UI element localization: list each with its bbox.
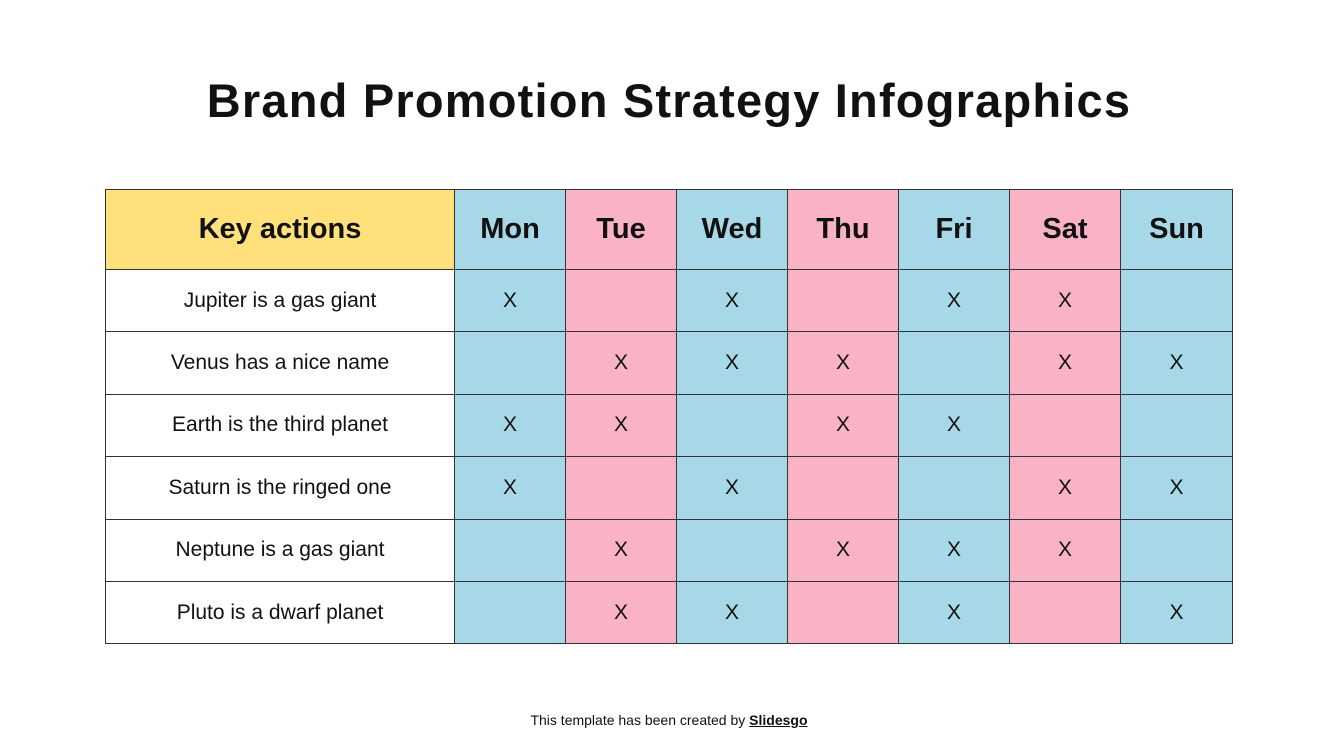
table: weekly key actions: X: [503, 413, 517, 436]
table: weekly key actions: X: [1169, 601, 1184, 624]
table: weekly key actions: X: [836, 351, 850, 374]
table: weekly key actions: X: [1169, 351, 1184, 374]
table: weekly key actions: X: [1058, 476, 1072, 499]
table: weekly key actions: X: [725, 601, 739, 624]
table: weekly key actions: X: [1058, 351, 1072, 374]
footer credit: This template has been created by Slidesgo: [530, 712, 808, 728]
table: weekly key actions: Earth is the third planet: [172, 413, 388, 436]
table: weekly key actions: X: [947, 289, 961, 312]
table: weekly key actions: Wed: [702, 213, 762, 245]
table: weekly key actions: X: [947, 601, 961, 624]
table: weekly key actions: X: [1169, 476, 1184, 499]
table: weekly key actions: X: [836, 538, 850, 561]
table: weekly key actions: [105, 189, 1233, 644]
table: weekly key actions: Sun: [1149, 213, 1204, 245]
table: weekly key actions: Neptune is a gas giant: [176, 538, 384, 561]
table: weekly key actions: Key actions: [199, 213, 361, 245]
table: weekly key actions: Tue: [596, 213, 646, 245]
table: weekly key actions: X: [614, 601, 628, 624]
table: weekly key actions: X: [836, 413, 850, 436]
table: weekly key actions: X: [725, 289, 739, 312]
table: weekly key actions: Venus has a nice name: [171, 351, 389, 374]
table: weekly key actions: X: [1058, 538, 1072, 561]
table: weekly key actions: X: [614, 538, 628, 561]
table: weekly key actions: X: [614, 351, 628, 374]
table: weekly key actions: Fri: [935, 213, 973, 245]
table: weekly key actions: X: [725, 476, 739, 499]
table: weekly key actions: Mon: [480, 213, 540, 245]
table: weekly key actions: Jupiter is a gas giant: [184, 289, 376, 312]
table: weekly key actions: Pluto is a dwarf planet: [177, 601, 383, 624]
table: weekly key actions: Thu: [816, 213, 870, 245]
table: weekly key actions: X: [725, 351, 739, 374]
table: weekly key actions: X: [503, 476, 517, 499]
table: weekly key actions: X: [503, 289, 517, 312]
table: weekly key actions: Sat: [1042, 213, 1088, 245]
table: weekly key actions: X: [1058, 289, 1072, 312]
table: weekly key actions: X: [947, 413, 961, 436]
table: weekly key actions: Saturn is the ringed one: [168, 476, 391, 499]
table: weekly key actions: X: [947, 538, 961, 561]
table: weekly key actions: X: [614, 413, 628, 436]
title: Brand Promotion Strategy Infographics: [207, 74, 1131, 127]
